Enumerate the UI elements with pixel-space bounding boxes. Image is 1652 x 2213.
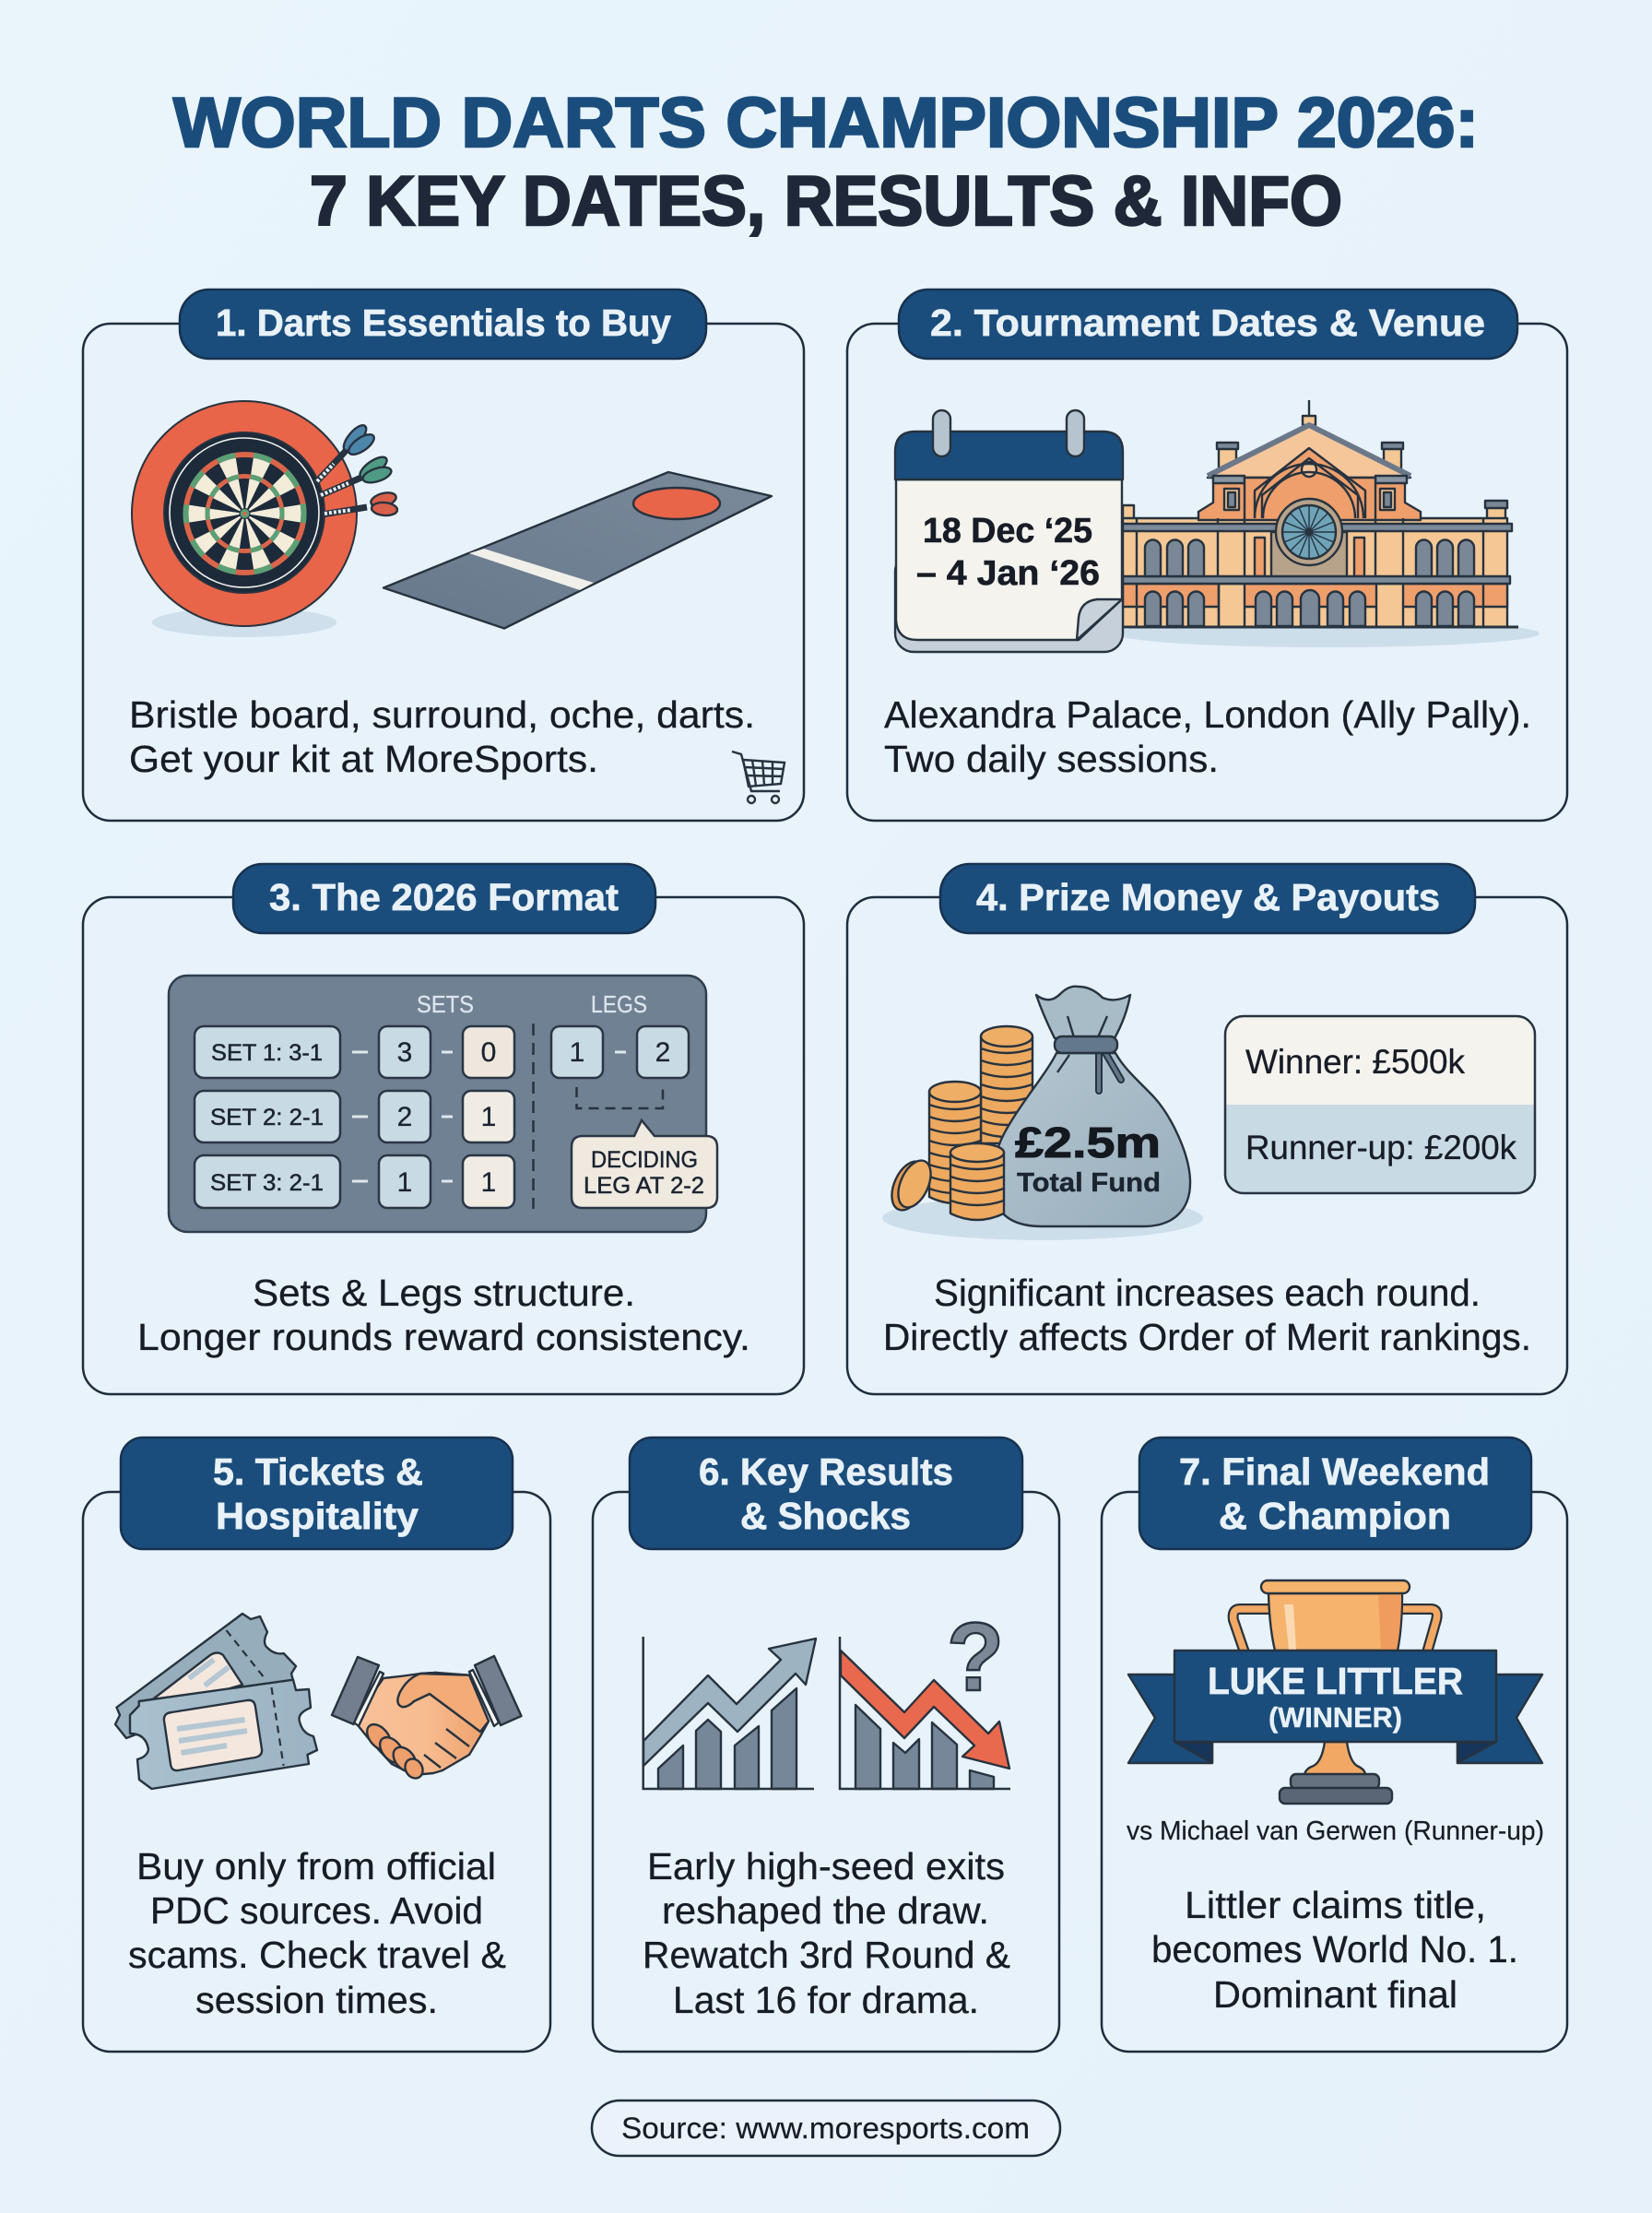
text: format description: Longer rounds reward consistency.	[137, 1316, 750, 1358]
text: results description: Rewatch 3rd Round &	[643, 1934, 1010, 1976]
text: tickets description: scams. Check travel &	[128, 1934, 506, 1976]
icon: money bag with coins: Total Fund	[1017, 1168, 1161, 1198]
text: final description: becomes World No. 1.	[1151, 1928, 1518, 1970]
heading: final weekend: 7. Final Weekend	[1179, 1450, 1490, 1493]
scoreboard: sets and legs: SET 2: 2-1	[210, 1105, 324, 1130]
chart: falling trend	[840, 1637, 1010, 1789]
panel: darts essentials	[83, 290, 804, 821]
heading: key results	[630, 1438, 1022, 1549]
icon: Alexandra Palace building	[1115, 400, 1540, 647]
icon: shopping cart	[732, 751, 785, 803]
scoreboard: sets and legs: 1	[397, 1167, 412, 1198]
chart: rising trend	[643, 1637, 816, 1789]
icon: oche mat	[384, 472, 772, 629]
text: results description: Early high-seed exits	[647, 1845, 1005, 1888]
title: WORLD DARTS CHAMPIONSHIP 2026:	[173, 84, 1479, 162]
text: final description: Dominant final	[1213, 1973, 1457, 2016]
heading: tickets and hospitality: 5. Tickets &	[213, 1450, 423, 1493]
text: final description	[1151, 1884, 1518, 2016]
scoreboard: sets and legs: 2	[655, 1037, 670, 1068]
text: prize description: Significant increases each round.	[934, 1272, 1481, 1314]
icon: trophy with banner: (WINNER)	[1268, 1701, 1402, 1734]
heading: 2026 format	[233, 864, 655, 933]
source pill: Source: www.moresports.com	[621, 2112, 1030, 2145]
text: tickets description	[128, 1845, 506, 2021]
scoreboard: sets and legs: 1	[570, 1037, 584, 1068]
icon: calendar with dates: – 4 Jan ‘26	[916, 554, 1100, 593]
heading: dates and venue	[899, 290, 1517, 359]
coin stack: front	[950, 1143, 1004, 1220]
title: 7 KEY DATES, RESULTS & INFO	[310, 162, 1342, 241]
scoreboard: sets and legs: 0	[481, 1037, 496, 1068]
text: prize description	[883, 1272, 1531, 1358]
icon: money bag with coins	[882, 987, 1203, 1240]
heading: 2026 format: 3. The 2026 Format	[269, 876, 619, 918]
text: tickets description: Buy only from official	[136, 1845, 496, 1888]
source pill	[592, 2101, 1060, 2156]
text: tickets description: session times.	[195, 1979, 438, 2021]
scoreboard: sets and legs: SETS	[417, 990, 474, 1018]
scoreboard: sets and legs: SET 3: 2-1	[210, 1170, 324, 1196]
panel: final weekend	[1102, 1438, 1567, 2052]
text: darts essentials description: Get your kit at MoreSports.	[129, 738, 598, 780]
heading: tickets and hospitality: Hospitality	[216, 1495, 419, 1537]
heading: prize money	[940, 864, 1475, 933]
text: format description	[137, 1272, 750, 1358]
icon: tickets	[115, 1614, 317, 1789]
text: darts essentials description	[129, 693, 755, 780]
scoreboard: sets and legs: 3	[397, 1037, 412, 1068]
coin stack: left	[929, 1082, 981, 1203]
scoreboard: sets and legs: 1	[481, 1102, 496, 1132]
text: results description: reshaped the draw.	[662, 1889, 989, 1932]
heading: dates and venue: 2. Tournament Dates & Venue	[930, 302, 1485, 344]
text: prize description: Directly affects Order of Merit rankings.	[883, 1316, 1531, 1358]
text: final description: Littler claims title,	[1185, 1884, 1486, 1926]
text: format description: Sets & Legs structure.	[253, 1272, 635, 1314]
coin stack: back	[981, 1026, 1032, 1143]
heading: key results: 6. Key Results	[699, 1450, 953, 1493]
payout box	[1225, 1016, 1535, 1193]
payout box: Runner-up: £200k	[1245, 1129, 1516, 1166]
icon: calendar with dates: 18 Dec ‘25	[923, 512, 1092, 550]
text: darts essentials description: Bristle board, surround, oche, darts.	[129, 693, 755, 736]
text: results description: Last 16 for drama.	[673, 1979, 979, 2021]
icon: handshake	[332, 1656, 522, 1781]
payout box: Winner: £500k	[1245, 1043, 1465, 1081]
heading: key results: & Shocks	[740, 1495, 911, 1537]
icon: calendar with dates	[895, 410, 1123, 652]
icon: question mark: ?	[947, 1604, 1004, 1711]
callout: deciding leg: LEG AT 2-2	[584, 1173, 704, 1199]
bag	[993, 987, 1190, 1226]
heading: darts essentials	[180, 290, 706, 359]
icon: trophy with banner	[1128, 1580, 1542, 1804]
panel: prize money	[847, 864, 1567, 1394]
scoreboard: sets and legs: LEGS	[591, 990, 647, 1018]
heading: final weekend: & Champion	[1219, 1495, 1451, 1537]
icon: trophy with banner: LUKE LITTLER	[1208, 1660, 1463, 1702]
heading: darts essentials: 1. Darts Essentials to Buy	[216, 302, 671, 344]
callout: deciding leg	[572, 1120, 717, 1208]
title	[173, 84, 1479, 241]
scoreboard: sets and legs: SET 1: 3-1	[211, 1040, 323, 1066]
panel: 2026 format	[83, 864, 804, 1394]
text: venue description: Two daily sessions.	[884, 738, 1219, 780]
scoreboard: sets and legs: 1	[481, 1167, 496, 1198]
text: runner-up: vs Michael van Gerwen (Runner-up)	[1127, 1817, 1544, 1846]
loose coin	[885, 1155, 938, 1215]
scoreboard: sets and legs: 2	[397, 1102, 412, 1132]
heading: tickets and hospitality	[121, 1438, 513, 1549]
text: venue description: Alexandra Palace, London (Ally Pally).	[884, 693, 1531, 736]
callout: deciding leg: DECIDING	[591, 1147, 698, 1173]
heading: prize money: 4. Prize Money & Payouts	[976, 876, 1440, 918]
icon: money bag with coins: £2.5m	[1015, 1118, 1161, 1166]
scoreboard: sets and legs	[169, 976, 717, 1232]
text: tickets description: PDC sources. Avoid	[150, 1889, 483, 1932]
panel: dates and venue	[847, 290, 1567, 821]
icon: dartboard with darts	[132, 401, 398, 637]
panel: tickets and hospitality	[83, 1438, 550, 2052]
panel: key results	[593, 1438, 1059, 2052]
text: results description	[643, 1845, 1010, 2021]
text: venue description	[884, 693, 1531, 780]
heading: final weekend	[1139, 1438, 1531, 1549]
